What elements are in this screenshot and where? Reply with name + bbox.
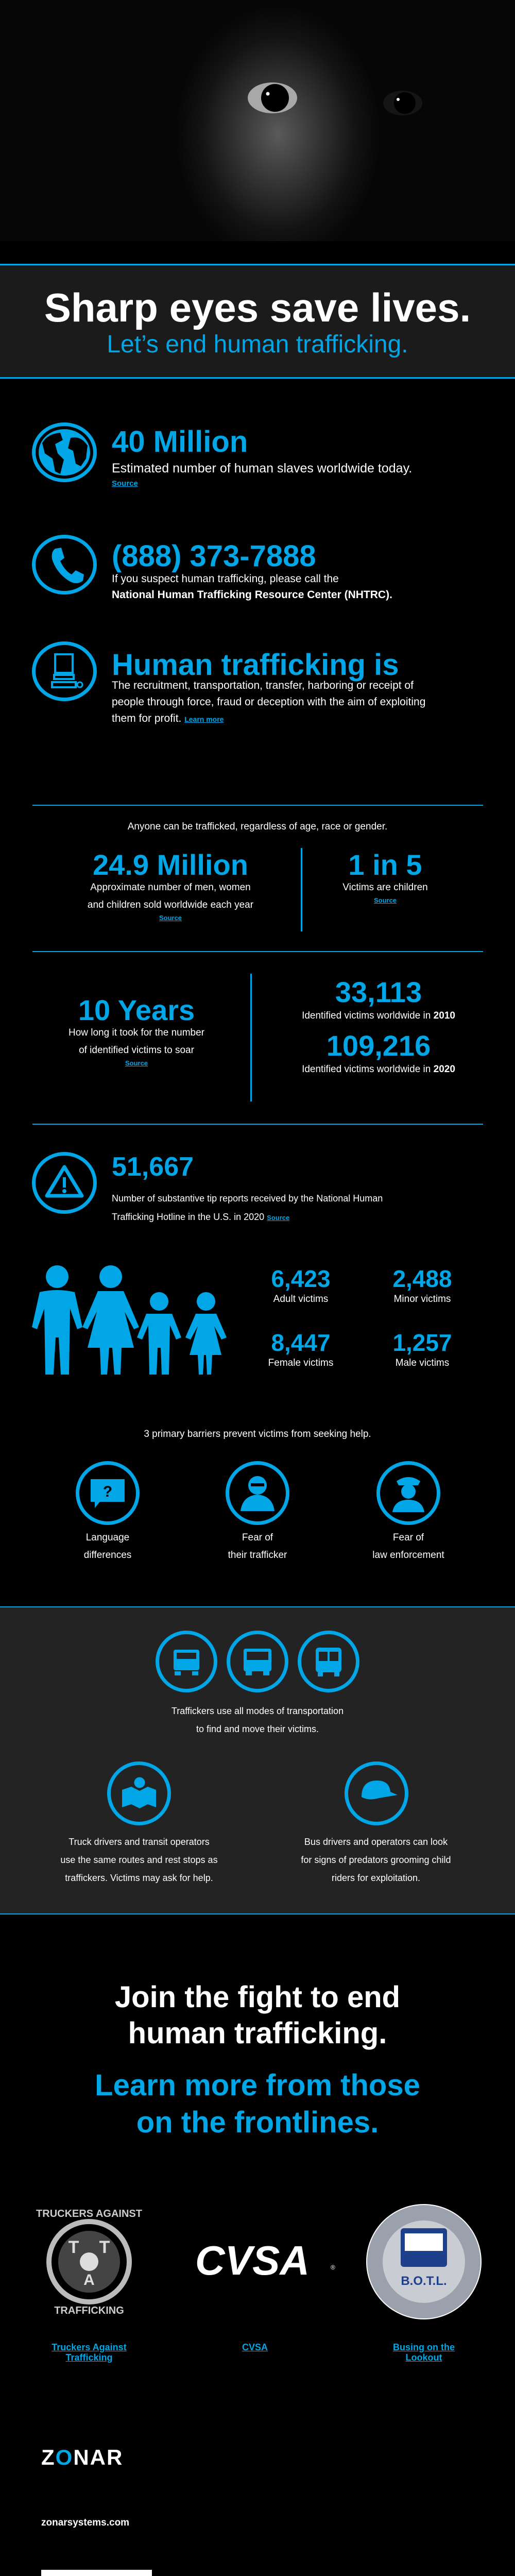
logo: truckers against trafficking: A bbox=[83, 2272, 95, 2289]
barrier: language bbox=[76, 1461, 140, 1561]
stat: 24.9 million: Source bbox=[159, 914, 182, 922]
stat: 24.9 million bbox=[88, 849, 253, 922]
logo: truckers against trafficking: Truckers Against bbox=[52, 2342, 127, 2352]
barrier: language: differences bbox=[84, 1550, 131, 1561]
stat: 1 in 5: Victims are children bbox=[342, 882, 428, 893]
icons: truck, school bus, transit bus bbox=[156, 1631, 359, 1692]
icon: phone bbox=[32, 535, 97, 595]
logo: busing on the lookout bbox=[366, 2204, 482, 2363]
call to action heading bbox=[115, 1980, 400, 2050]
stat: 24.9 million: and children sold worldwide each year bbox=[88, 900, 253, 910]
description: If you suspect human trafficking, please call the bbox=[112, 573, 339, 585]
call to action heading: Join the fight to end bbox=[115, 1980, 400, 2014]
call to action subheading: on the frontlines. bbox=[136, 2106, 379, 2139]
description: Trafficking Hotline in the U.S. in 2020 Source bbox=[112, 1212, 289, 1222]
description: The recruitment, transportation, transfer, harboring or receipt of bbox=[112, 680, 414, 691]
call to action subheading bbox=[95, 2069, 420, 2139]
stat: 10 years bbox=[68, 994, 204, 1067]
logo: truckers against trafficking: T bbox=[68, 2238, 79, 2257]
subtitle: Let’s end human trafficking. bbox=[107, 331, 408, 358]
logo: busing on the lookout: B.O.T.L. bbox=[401, 2274, 447, 2288]
stat: adult victims bbox=[271, 1265, 331, 1304]
logo: truckers against trafficking: TRUCKERS AGAINST bbox=[36, 2208, 142, 2219]
logo: busing on the lookout: Lookout bbox=[406, 2352, 442, 2363]
icon: fist in chains bbox=[32, 641, 97, 701]
barrier: language: ? bbox=[103, 1483, 112, 1500]
phone number: (888) 373-7888 bbox=[112, 539, 316, 573]
stat: adult victims: Adult victims bbox=[273, 1294, 328, 1304]
text: bus drivers bbox=[301, 1837, 451, 1883]
stats grid bbox=[268, 1265, 452, 1368]
barrier: law enforcement: Fear of bbox=[393, 1532, 424, 1543]
description: them for profit. Learn more bbox=[112, 713, 224, 724]
text: modes of transportation: to find and move their victims. bbox=[196, 1724, 319, 1734]
text: bus drivers: Bus drivers and operators can look bbox=[304, 1837, 448, 1847]
stat: 1 in 5 bbox=[342, 849, 428, 904]
stat: definition bbox=[32, 641, 425, 724]
stat: 10 years: How long it took for the number bbox=[68, 1027, 204, 1038]
description bbox=[112, 1193, 383, 1222]
barrier: law enforcement bbox=[372, 1461, 444, 1561]
text: bus drivers: for signs of predators grooming child bbox=[301, 1855, 451, 1865]
description: National Human Trafficking Resource Center (NHTRC). bbox=[112, 589, 392, 601]
source link: Source bbox=[112, 479, 138, 488]
stat: 2010 and 2020 bbox=[302, 976, 455, 1075]
text: modes of transportation: Traffickers use all modes of transportation bbox=[171, 1706, 344, 1716]
stat: minor victims bbox=[392, 1265, 452, 1304]
logo: busing on the lookout: Busing on the bbox=[393, 2342, 455, 2352]
stat: female victims: 8,447 bbox=[271, 1329, 331, 1356]
logo: CVSA bbox=[195, 2238, 335, 2352]
website: zonarsystems.com bbox=[41, 2517, 129, 2528]
stat: tip reports bbox=[32, 1152, 383, 1222]
heading: 51,667 bbox=[112, 1152, 194, 1182]
stat: minor victims: Minor victims bbox=[394, 1294, 451, 1304]
heading: 40 Million bbox=[112, 425, 248, 459]
stat: female victims bbox=[268, 1329, 333, 1368]
icon: cap bbox=[345, 1761, 408, 1825]
logo: Zonar: ZONAR bbox=[41, 2445, 123, 2469]
header banner bbox=[0, 264, 515, 379]
logo: CVSA: CVSA bbox=[195, 2238, 310, 2283]
text: bus drivers: riders for exploitation. bbox=[332, 1873, 420, 1883]
stat: female victims: Female victims bbox=[268, 1358, 333, 1368]
logo: CVSA: CVSA bbox=[242, 2342, 268, 2352]
text: truck drivers: use the same routes and rest stops as bbox=[60, 1855, 218, 1865]
barrier: trafficker bbox=[226, 1461, 289, 1561]
heading: Human trafficking is bbox=[112, 648, 399, 682]
stat: 2010 and 2020: Identified victims worldwide in 2020 bbox=[302, 1064, 455, 1075]
stat: minor victims: 2,488 bbox=[392, 1265, 452, 1292]
logo: truckers against trafficking: Trafficking bbox=[65, 2352, 113, 2363]
stat: male victims bbox=[392, 1329, 452, 1368]
barriers heading: 3 primary barriers prevent victims from seeking help. bbox=[144, 1429, 371, 1439]
barrier: language: Language bbox=[86, 1532, 129, 1543]
stat: 2010 and 2020: Identified victims worldwide in 2010 bbox=[302, 1010, 455, 1021]
description: Estimated number of human slaves worldwide today. bbox=[112, 461, 412, 476]
stat: 10 years: Source bbox=[125, 1059, 148, 1067]
logo: CVSA: ® bbox=[331, 2264, 335, 2271]
footer bar bbox=[41, 2570, 152, 2576]
description: Number of substantive tip reports received by the National Human bbox=[112, 1193, 383, 1204]
barrier: trafficker: their trafficker bbox=[228, 1550, 287, 1561]
barrier: trafficker: Fear of bbox=[242, 1532, 273, 1543]
stat: 24.9 million: 24.9 Million bbox=[93, 849, 248, 881]
stat: male victims: Male victims bbox=[396, 1358, 449, 1368]
logo: truckers against trafficking: T bbox=[99, 2238, 110, 2257]
stat: 10 years: of identified victims to soar bbox=[79, 1045, 194, 1056]
call to action heading: human trafficking. bbox=[128, 2016, 387, 2050]
stat: 40 million bbox=[32, 422, 412, 488]
text: truck drivers: Truck drivers and transit operators bbox=[68, 1837, 210, 1847]
stat: 24.9 million: Approximate number of men, women bbox=[90, 882, 251, 893]
hero photo bbox=[0, 0, 515, 241]
stat: hotline bbox=[32, 535, 392, 601]
call to action subheading: Learn more from those bbox=[95, 2069, 420, 2102]
stat: male victims: 1,257 bbox=[392, 1329, 452, 1356]
stat: 2010 and 2020: 109,216 bbox=[327, 1029, 431, 1062]
description: people through force, fraud or deception with the aim of exploiting bbox=[112, 696, 425, 708]
description bbox=[112, 680, 425, 724]
icon: warning bbox=[32, 1152, 97, 1214]
panel: transportation bbox=[0, 1606, 515, 1914]
stat: 1 in 5: 1 in 5 bbox=[348, 849, 422, 881]
icon: map pin bbox=[107, 1761, 171, 1825]
text: truck drivers: traffickers. Victims may ask for help. bbox=[65, 1873, 213, 1883]
intro line: Anyone can be trafficked, regardless of age, race or gender. bbox=[128, 821, 387, 832]
logo: truckers against trafficking bbox=[36, 2208, 142, 2363]
stat: 1 in 5: Source bbox=[374, 896, 397, 904]
stat: 10 years: 10 Years bbox=[78, 994, 195, 1026]
icon: globe bbox=[32, 422, 97, 482]
stat: 2010 and 2020: 33,113 bbox=[335, 976, 422, 1008]
text: truck drivers bbox=[60, 1837, 218, 1883]
icon: family figures bbox=[32, 1265, 227, 1375]
text: modes of transportation bbox=[171, 1706, 344, 1734]
logo: truckers against trafficking: TRAFFICKING bbox=[54, 2305, 124, 2316]
description bbox=[112, 573, 392, 601]
title: Sharp eyes save lives. bbox=[44, 285, 471, 330]
barrier: law enforcement: law enforcement bbox=[372, 1550, 444, 1561]
stat: adult victims: 6,423 bbox=[271, 1265, 331, 1292]
